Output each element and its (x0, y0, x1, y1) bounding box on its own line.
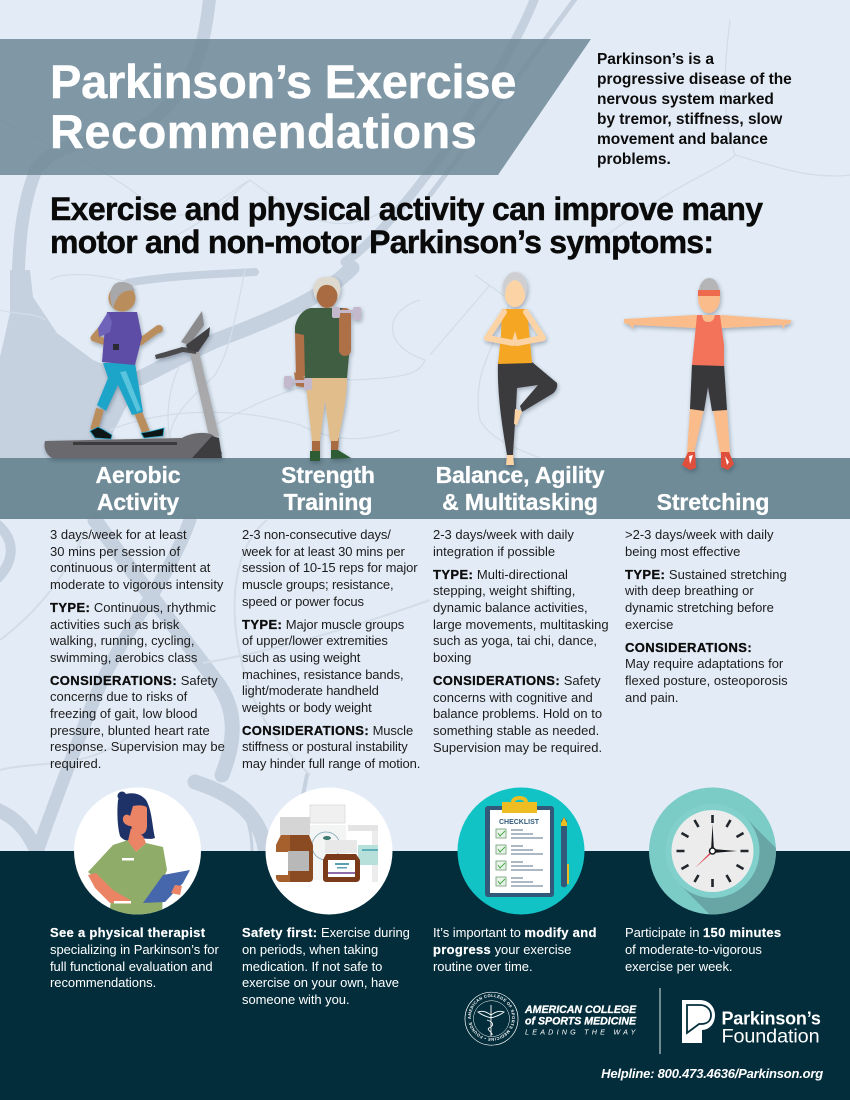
footer text: modify and progress: It’s important to modify and (433, 925, 597, 940)
stretching: considerations: and pain. (625, 690, 678, 705)
footer text: safety first: Safety first: Exercise during (242, 925, 410, 940)
stretching: considerations: May require adaptations for (625, 656, 783, 671)
strength: text column: speed or power focus (242, 594, 364, 609)
aerobic: text column: 3 days/week for at least (50, 527, 187, 542)
aerobic: type: walking, running, cycling, (50, 633, 195, 648)
stretching: considerations: flexed posture, osteoporosis (625, 673, 788, 688)
logo: ACSM seal: AMERICAN COLLEGE OF SPORTS MEDICINE • FOUNDED 1954 (468, 994, 515, 1041)
aerobic: considerations: concerns due to risks of (50, 689, 187, 704)
logo: ACSM wordmark (524, 1004, 639, 1036)
aerobic: considerations: CONSIDERATIONS: Safety (50, 673, 218, 688)
footer text: physical therapist: full functional evaluation and (50, 959, 213, 974)
stretching: text column: being most effective (625, 544, 740, 559)
strength: text column: muscle groups; resistance, (242, 577, 394, 592)
footer band (0, 851, 850, 1100)
strength: text column: 2-3 non-consecutive days/ (242, 527, 391, 542)
logo: ACSM seal (464, 992, 518, 1046)
strength: text column: session of 10-15 reps for major (242, 560, 417, 575)
category band (0, 458, 850, 519)
logo: ACSM wordmark: of SPORTS MEDICINE (525, 1016, 637, 1028)
aerobic: text column: continuous or intermittent at (50, 560, 210, 575)
footer text: physical therapist: recommendations. (50, 975, 156, 990)
logo: Parkinson's Foundation (682, 1000, 821, 1048)
heading: Aerobic Activity: Aerobic (96, 462, 180, 488)
balance: considerations: CONSIDERATIONS: Safety (433, 673, 601, 688)
headline: Exercise and physical activity can improve many (50, 190, 762, 226)
icon: person with arms stretched (624, 278, 791, 470)
stretching: considerations: CONSIDERATIONS: (625, 640, 752, 655)
heading: Balance, Agility & Multitasking (436, 462, 605, 516)
aerobic: considerations: required. (50, 756, 101, 771)
aerobic: text column: 30 mins per session of (50, 544, 180, 559)
footer text: safety first (242, 925, 410, 1007)
divider (660, 988, 661, 1054)
aerobic: considerations: freezing of gait, low blood (50, 706, 197, 721)
footer text: 150 minutes: of moderate-to-vigorous (625, 942, 762, 957)
strength: considerations: may hinder full range of motion. (242, 756, 420, 771)
aerobic: text column: moderate to vigorous intensity (50, 577, 223, 592)
logo: ACSM wordmark: AMERICAN COLLEGE (524, 1004, 637, 1016)
footer text: safety first: medication. If not safe to (242, 959, 382, 974)
balance: considerations (433, 673, 602, 755)
stretching: type: dynamic stretching before (625, 600, 774, 615)
strength: type: light/moderate handheld (242, 683, 379, 698)
strength: type: such as using weight (242, 650, 360, 665)
footer text: 150 minutes (625, 925, 781, 974)
heading: Strength Training (281, 462, 375, 516)
balance: considerations: balance problems. Hold on to (433, 706, 602, 721)
intro text: Parkinson’s is a (597, 51, 714, 68)
heading: Balance, Agility & Multitasking: & Multitasking (442, 489, 598, 515)
footer text: 150 minutes: exercise per week. (625, 959, 732, 974)
title (50, 55, 516, 158)
aerobic: considerations: response. Supervision may be (50, 739, 225, 754)
icon: clock (649, 788, 776, 914)
circular icons (74, 788, 776, 914)
icon: person in tree pose (487, 272, 557, 465)
stretching: text column: >2-3 days/week with daily (625, 527, 774, 542)
runner capris (97, 363, 143, 415)
aerobic: considerations (50, 673, 225, 771)
balance: type: large movements, multitasking (433, 617, 609, 632)
aerobic: type: swimming, aerobics class (50, 650, 197, 665)
heading: Stretching: Stretching (657, 489, 769, 515)
stretching: type: TYPE: Sustained stretching (625, 567, 787, 582)
footer text: 150 minutes: Participate in 150 minutes (625, 925, 781, 940)
strength: considerations: stiffness or postural instability (242, 739, 408, 754)
headline (50, 190, 764, 260)
title: Recommendations (50, 105, 477, 158)
heading: Strength Training: Strength (281, 462, 375, 488)
balance: considerations: Supervision may be required. (433, 740, 602, 755)
footer text: physical therapist: specializing in Parkinson’s for (50, 942, 219, 957)
stretching: text column (625, 527, 788, 705)
footer text: safety first: someone with you. (242, 992, 350, 1007)
balance: considerations: concerns with cognitive and (433, 690, 593, 705)
footer text: physical therapist: See a physical therapist (50, 925, 205, 940)
logo: Parkinson's Foundation: Parkinson’s (722, 1008, 821, 1028)
title banner (0, 39, 591, 175)
footer text: physical therapist (50, 925, 219, 990)
headline: motor and non-motor Parkinson’s symptoms: (50, 224, 713, 260)
aerobic: text column (50, 527, 225, 771)
balance: text column (433, 527, 609, 755)
heading: Strength Training: Training (284, 489, 372, 515)
footer text: modify and progress: progress your exercise (433, 942, 571, 957)
logo: Parkinson's Foundation: Foundation (722, 1026, 819, 1048)
aerobic: type: activities such as brisk (50, 617, 179, 632)
icon: checklist clipboard (458, 788, 584, 914)
treadmill (44, 311, 222, 458)
balance: considerations: something stable as needed. (433, 723, 599, 738)
icon: physical therapist (74, 788, 201, 925)
intro text: movement and balance (597, 131, 768, 148)
stretching: type (625, 567, 787, 632)
footer text: safety first: exercise on your own, have (242, 975, 399, 990)
balance: text column: integration if possible (433, 544, 555, 559)
stretching: type: with deep breathing or (625, 583, 754, 598)
balance: type: such as yoga, tai chi, dance, (433, 633, 597, 648)
icon: person with dumbbells (284, 277, 361, 461)
balance: type: dynamic balance activities, (433, 600, 588, 615)
heading: Aerobic Activity: Activity (97, 489, 179, 515)
aerobic: type (50, 600, 216, 665)
heading: Aerobic Activity (96, 462, 180, 516)
strength: type: of upper/lower extremities (242, 633, 388, 648)
helpline: Helpline: 800.473.4636/Parkinson.org (601, 1066, 823, 1081)
footer text: safety first: on periods, when taking (242, 942, 378, 957)
strength: considerations: CONSIDERATIONS: Muscle (242, 723, 413, 738)
balance: text column: 2-3 days/week with daily (433, 527, 574, 542)
heading: Balance, Agility & Multitasking: Balance, Agility (436, 462, 604, 488)
footer text: modify and progress: routine over time. (433, 959, 533, 974)
intro text: problems. (597, 151, 671, 168)
aerobic: type: TYPE: Continuous, rhythmic (50, 600, 216, 615)
checklist label: CHECKLIST (499, 819, 540, 826)
runner shirt (102, 312, 142, 365)
icon: person on treadmill (44, 282, 222, 458)
stretching: type: exercise (625, 617, 673, 632)
footer text: modify and progress (433, 925, 597, 974)
intro text: progressive disease of the (597, 71, 792, 88)
icon: medicine bottles (266, 788, 392, 914)
logo: ACSM wordmark: LEADING THE WAY (525, 1028, 639, 1036)
intro text: nervous system marked (597, 91, 774, 108)
aerobic: considerations: pressure, blunted heart rate (50, 723, 210, 738)
runner limbs (94, 326, 123, 348)
strength: text column (242, 527, 420, 771)
strength: type: TYPE: Major muscle groups (242, 617, 404, 632)
strength: type: weights or body weight (242, 700, 372, 715)
intro text: by tremor, stiffness, slow (597, 111, 782, 128)
strength: type: machines, resistance bands, (242, 667, 404, 682)
balance: type: TYPE: Multi-directional (433, 567, 568, 582)
balance: type (433, 567, 609, 665)
intro text (597, 51, 792, 168)
strength: considerations (242, 723, 420, 771)
strength: text column: week for at least 30 mins per (242, 544, 405, 559)
strength: type (242, 617, 404, 715)
stretching: considerations (625, 640, 788, 705)
balance: type: stepping, weight shifting, (433, 583, 575, 598)
illustrations of four exercisers (43, 272, 794, 474)
balance: type: boxing (433, 650, 471, 665)
title: Parkinson’s Exercise (50, 55, 516, 108)
